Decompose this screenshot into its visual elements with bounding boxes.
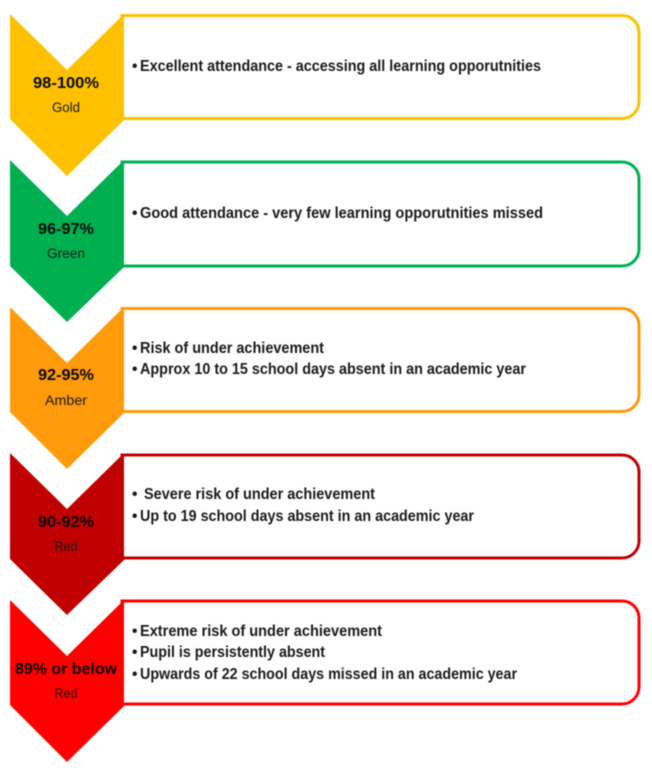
- label: 90-92%: 90-92%: [38, 514, 94, 531]
- description: dark red: •: [132, 508, 137, 525]
- description: bright red: [132, 623, 517, 683]
- label: Red: Red: [54, 539, 78, 554]
- description: bright red: •: [132, 644, 137, 661]
- description: bright red: •: [132, 623, 137, 640]
- label: 96-97%: 96-97%: [38, 221, 94, 238]
- label: Gold: Gold: [52, 100, 80, 115]
- text box: green: [122, 162, 639, 266]
- panel: amber band: [10, 307, 639, 469]
- description: bright red: •: [132, 666, 137, 683]
- chevron: dark red: [10, 453, 124, 615]
- description: bright red: Pupil is persistently absent: [140, 644, 325, 661]
- panel: dark red band: [10, 453, 639, 615]
- description: amber: [132, 340, 526, 378]
- chevron: amber: [10, 307, 124, 469]
- text box: dark red: [122, 455, 639, 558]
- description: dark red: •: [132, 486, 137, 503]
- description: gold: •: [132, 58, 137, 75]
- description: dark red: Severe risk of under achievement: [144, 486, 375, 503]
- label: Green: Green: [47, 246, 85, 261]
- description: amber: Risk of under achievement: [140, 340, 324, 357]
- description: amber: Approx 10 to 15 school days absent in an academic year: [140, 361, 526, 378]
- chevron: bright red: [10, 600, 124, 762]
- description: amber: •: [132, 340, 137, 357]
- chevron: green: [10, 160, 124, 322]
- label: 89% or below: 89% or below: [15, 661, 118, 678]
- description: dark red: Up to 19 school days absent in an academic year: [140, 508, 474, 525]
- panel: gold band: [10, 14, 639, 176]
- chevron: gold: [10, 14, 124, 176]
- label: Amber: Amber: [45, 393, 88, 408]
- text box: amber: [122, 308, 639, 412]
- description: dark red: [132, 486, 474, 525]
- text box: bright red: [122, 601, 639, 704]
- description: green: Good attendance - very few learning opporutnities missed: [140, 205, 543, 222]
- description: amber: •: [132, 361, 137, 378]
- label: Red: Red: [54, 686, 78, 701]
- panel: green band: [10, 160, 639, 322]
- description: green: •: [132, 205, 137, 222]
- description: bright red: Upwards of 22 school days missed in an academic year: [140, 666, 517, 683]
- label: 92-95%: 92-95%: [38, 367, 94, 384]
- label: 98-100%: 98-100%: [33, 75, 99, 92]
- panel: bright red band: [10, 600, 639, 762]
- text box: gold: [122, 16, 639, 118]
- description: bright red: Extreme risk of under achievement: [140, 623, 382, 640]
- description: gold: Excellent attendance - accessing all learning opporutnities: [140, 58, 541, 75]
